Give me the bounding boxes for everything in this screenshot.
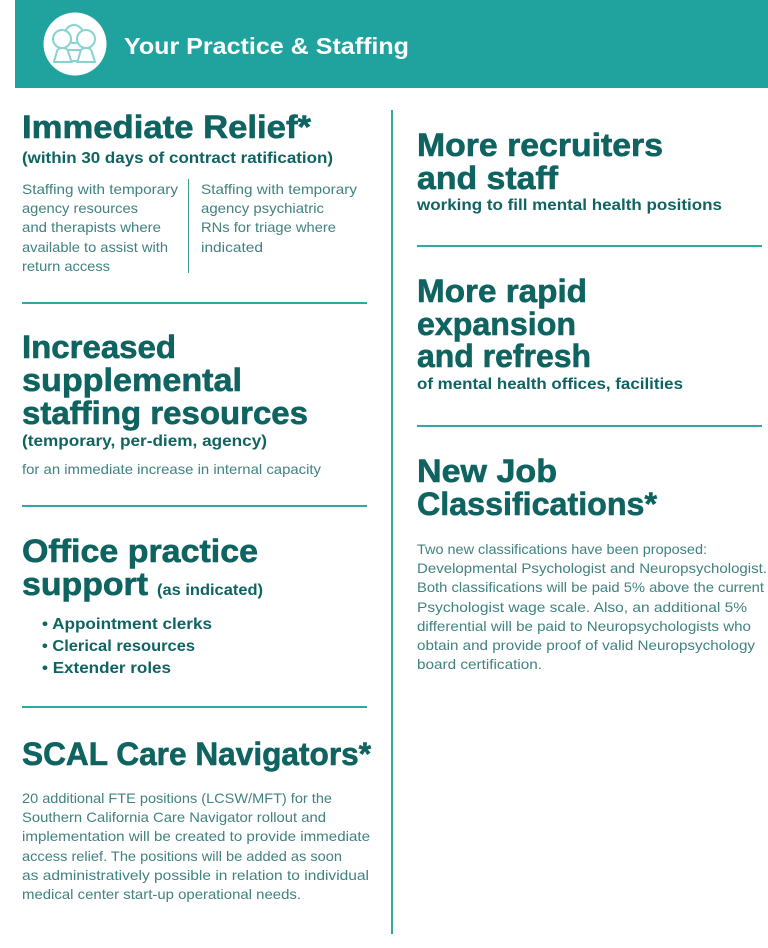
section: rapid expansion bbox=[417, 273, 683, 393]
text block: classifications detail: board certification. bbox=[417, 656, 542, 672]
heading: More recruiters and staff: More recruiters bbox=[417, 127, 663, 163]
text block: classifications detail: Psychologist wage scale. Also, an additional 5% bbox=[417, 599, 747, 615]
heading: More recruiters and staff bbox=[417, 127, 663, 196]
bullet list: • Extender roles bbox=[42, 660, 171, 677]
text block: psychiatric RNs: agency psychiatric bbox=[201, 200, 324, 216]
section: supplemental staffing bbox=[22, 329, 321, 477]
heading: Increased supplemental staffing resources: supplemental bbox=[22, 362, 242, 398]
text block: navigators detail: 20 additional FTE positions (LCSW/MFT) for the bbox=[22, 790, 332, 806]
text block: navigators detail: medical center start-up operational needs. bbox=[22, 886, 301, 902]
heading: New Job Classifications: New Job bbox=[417, 453, 557, 489]
text block: psychiatric RNs: indicated bbox=[201, 239, 263, 255]
heading: More rapid expansion and refresh: and refresh bbox=[417, 338, 591, 374]
column divider bbox=[391, 110, 393, 934]
section: Immediate Relief bbox=[22, 109, 357, 274]
heading: New Job Classifications bbox=[417, 453, 658, 522]
text block: therapists: Staffing with temporary bbox=[22, 181, 178, 197]
heading: Immediate Relief: Immediate Relief* bbox=[22, 109, 312, 145]
bullet list: • Appointment clerks bbox=[42, 616, 212, 633]
text block: classifications detail bbox=[417, 541, 767, 672]
text block: navigators detail bbox=[22, 790, 370, 902]
text block: classifications detail: Both classifications will be paid 5% above the current bbox=[417, 579, 764, 595]
text block: psychiatric RNs: Staffing with temporary bbox=[201, 181, 357, 197]
text block: classifications detail: differential will be paid to Neuropsychologists who bbox=[417, 618, 751, 634]
subheading: temporary: (temporary, per-diem, agency) bbox=[22, 433, 267, 450]
heading: Office practice support: support bbox=[22, 566, 148, 602]
heading: More rapid expansion and refresh: expansion bbox=[417, 306, 576, 342]
bullet list: • Clerical resources bbox=[42, 638, 195, 655]
heading: New Job Classifications: Classifications* bbox=[417, 486, 658, 522]
heading: More rapid expansion and refresh: More rapid bbox=[417, 273, 587, 309]
text block: classifications detail: Two new classifications have been proposed: bbox=[417, 541, 707, 557]
heading: Increased supplemental staffing resources: staffing resources bbox=[22, 395, 308, 431]
text block: psychiatric RNs bbox=[201, 181, 357, 255]
subheading: mental health positions: working to fill mental health positions bbox=[416, 197, 722, 214]
text block: navigators detail: implementation will be created to provide immediate bbox=[22, 828, 370, 844]
text block: therapists: agency resources bbox=[22, 200, 138, 216]
text block: therapists: return access bbox=[22, 258, 110, 274]
bullet list bbox=[42, 616, 212, 677]
section: SCAL Care Navigators bbox=[22, 736, 372, 902]
text block: therapists: and therapists where bbox=[22, 219, 161, 235]
text block: therapists: available to assist with bbox=[22, 239, 168, 255]
heading: Office practice support: Office practice bbox=[22, 533, 258, 569]
text block: navigators detail: access relief. The positions will be added as soon bbox=[22, 848, 342, 864]
heading: Increased supplemental staffing resources: Increased bbox=[22, 329, 176, 365]
banner title: Your Practice & Staffing bbox=[124, 33, 409, 59]
text block: psychiatric RNs: RNs for triage where bbox=[201, 219, 336, 235]
icon: group of people bbox=[44, 12, 106, 76]
text block: capacity: for an immediate increase in internal capacity bbox=[22, 461, 321, 477]
section: office practice support bbox=[22, 533, 263, 677]
heading: Increased supplemental staffing resources bbox=[22, 329, 308, 431]
text block: navigators detail: as administratively possible in relation to individual bbox=[22, 867, 369, 883]
heading: Office practice support bbox=[22, 533, 263, 602]
section: recruiters bbox=[416, 127, 722, 214]
section: new job classifications bbox=[417, 453, 767, 672]
heading: More rapid expansion and refresh bbox=[417, 273, 591, 374]
subheading: offices: of mental health offices, facilities bbox=[417, 376, 683, 393]
heading: More recruiters and staff: and staff bbox=[417, 160, 558, 196]
text block: classifications detail: obtain and provide proof of valid Neuropsychology bbox=[417, 637, 755, 653]
text block: classifications detail: Developmental Psychologist and Neuropsychologist. bbox=[417, 560, 767, 576]
heading: Office practice support: (as indicated) bbox=[157, 582, 263, 599]
text block: navigators detail: Southern California Care Navigator rollout and bbox=[22, 809, 326, 825]
header banner bbox=[15, 0, 768, 88]
heading: SCAL Care Navigators: SCAL Care Navigators* bbox=[22, 736, 372, 772]
subheading: timing: (within 30 days of contract ratification) bbox=[22, 150, 333, 167]
text block: therapists bbox=[22, 181, 178, 274]
